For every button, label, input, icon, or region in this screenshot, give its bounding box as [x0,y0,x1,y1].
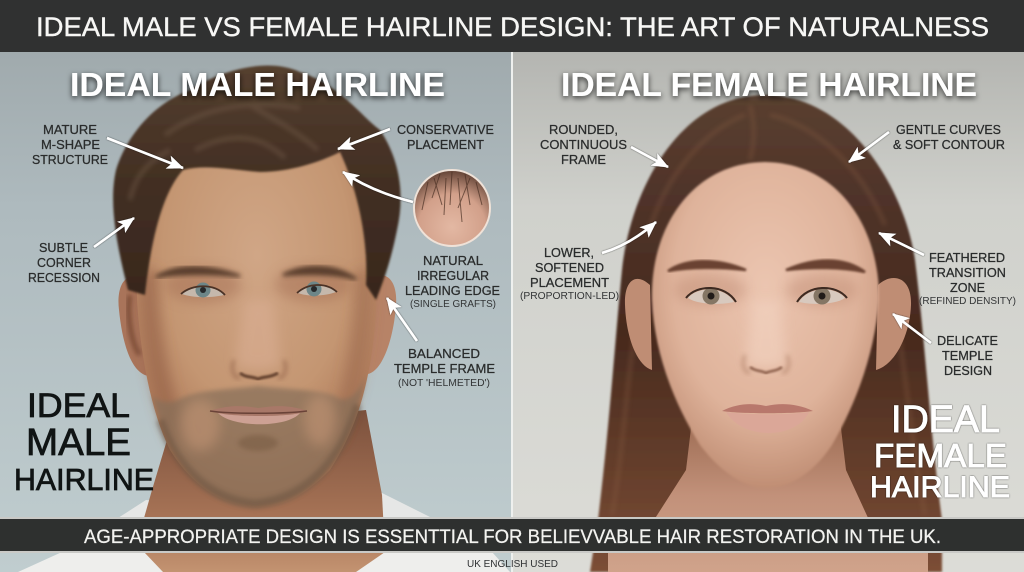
arrow: gentle curves [849,132,889,162]
face side shading [140,270,374,445]
callout: rounded continuous frame [540,123,627,167]
male hair [113,66,401,300]
callout: mature M-shape: M-SHAPE [41,138,100,152]
callout: delicate temple design: DELICATE [937,334,998,348]
callout: gentle curves: & SOFT CONTOUR [893,138,1005,152]
neck [144,410,385,572]
large label: ideal female hairline: FEMALE [874,437,1007,474]
heading: male: IDEAL MALE HAIRLINE [70,66,445,103]
large label: ideal male hairline: HAIRLINE [14,462,154,497]
callout: balanced temple frame [394,347,495,389]
nose and mouth [210,300,307,424]
beard [152,372,366,507]
arrow: feathered transition [879,233,924,255]
callout: natural irregular leading edge: NATURAL [423,254,483,268]
callout: lower softened placement: SOFTENED [535,261,604,275]
callout: rounded continuous frame: FRAME [561,153,606,167]
callout: subtle corner recession: CORNER [37,256,91,270]
callout: delicate temple design: DESIGN [944,364,992,378]
arrow: balanced temple frame [387,298,417,341]
arrow: natural leading edge [343,172,413,202]
large label: ideal female hairline: IDEAL [891,399,1000,441]
arrow: subtle corner recession [94,218,134,247]
male ears [118,275,396,376]
inset: hairline close-up [414,170,490,246]
arrow: mature M-shape [107,138,183,168]
large label: ideal male hairline [14,387,154,497]
callout: feathered transition zone: ZONE [950,281,985,295]
large label: ideal male hairline: IDEAL [27,387,130,425]
female hair [590,95,942,572]
banner text: AGE-APPROPRIATE DESIGN IS ESSENTTIAL FOR BELIEVVABLE HAIR RESTORATION IN THE UK. [84,527,941,548]
neck and shoulders [608,420,928,572]
arrow: rounded frame [631,147,668,167]
nose and lips [722,300,813,433]
female face [652,162,879,488]
callout: natural irregular leading edge: LEADING EDGE [405,284,500,298]
footnote: UK ENGLISH USED [467,558,558,570]
large label: ideal female hairline [870,399,1010,504]
heading: female: IDEAL FEMALE HAIRLINE [561,66,977,103]
female ears [625,278,911,370]
callout: feathered transition zone [919,251,1016,307]
callout: natural irregular leading edge: (SINGLE GRAFTS) [410,299,496,310]
callout: conservative placement: CONSERVATIVE [397,123,494,137]
callout: mature M-shape [32,123,108,167]
callout: feathered transition zone: TRANSITION [929,266,1006,280]
title: IDEAL MALE VS FEMALE HAIRLINE DESIGN: THE ART OF NATURALNESS [36,12,989,42]
arrow: lower placement [602,222,656,253]
callout: natural irregular leading edge: IRREGULAR [417,269,489,283]
callout: lower softened placement [520,246,619,302]
eyes and brows [156,266,356,303]
large label: ideal male hairline: MALE [26,422,131,464]
large label: ideal female hairline: HAIRLINE [870,471,1010,504]
callout: feathered transition zone: FEATHERED [929,251,1005,265]
panel: female portrait [512,52,1024,572]
callout: balanced temple frame: (NOT 'HELMETED') [398,378,490,389]
callout: subtle corner recession: RECESSION [28,271,100,285]
callout: balanced temple frame: BALANCED [408,347,480,361]
callout: delicate temple design: TEMPLE [942,349,993,363]
divider [511,52,513,572]
shirt [118,492,432,520]
male face [137,120,377,507]
arrow: conservative placement [338,129,390,149]
arrow: delicate temple [893,314,931,343]
bottom banner [0,517,1024,553]
callout: gentle curves [893,123,1005,152]
callout: delicate temple design [937,334,998,378]
arrows [94,129,931,343]
title bar [0,0,1024,52]
callout: subtle corner recession: SUBTLE [39,241,88,255]
callout: lower softened placement: (PROPORTION-LED) [520,291,619,302]
callout: rounded continuous frame: CONTINUOUS [540,138,627,152]
callout: mature M-shape: MATURE [43,123,97,137]
callout: feathered transition zone: (REFINED DENSITY) [919,296,1016,307]
callout: gentle curves: GENTLE CURVES [896,123,1001,137]
callout: balanced temple frame: TEMPLE FRAME [394,362,495,376]
callout: mature M-shape: STRUCTURE [32,153,108,167]
callout: subtle corner recession [28,241,100,285]
callout: rounded continuous frame: ROUNDED, [549,123,618,137]
callout: natural irregular leading edge [405,254,500,310]
callout: conservative placement: PLACEMENT [407,138,484,152]
panel: male portrait [0,52,512,572]
eyes and brows [668,260,865,306]
callout: conservative placement [397,123,494,152]
callout: lower softened placement: LOWER, [544,246,594,260]
callout: lower softened placement: PLACEMENT [530,276,609,290]
